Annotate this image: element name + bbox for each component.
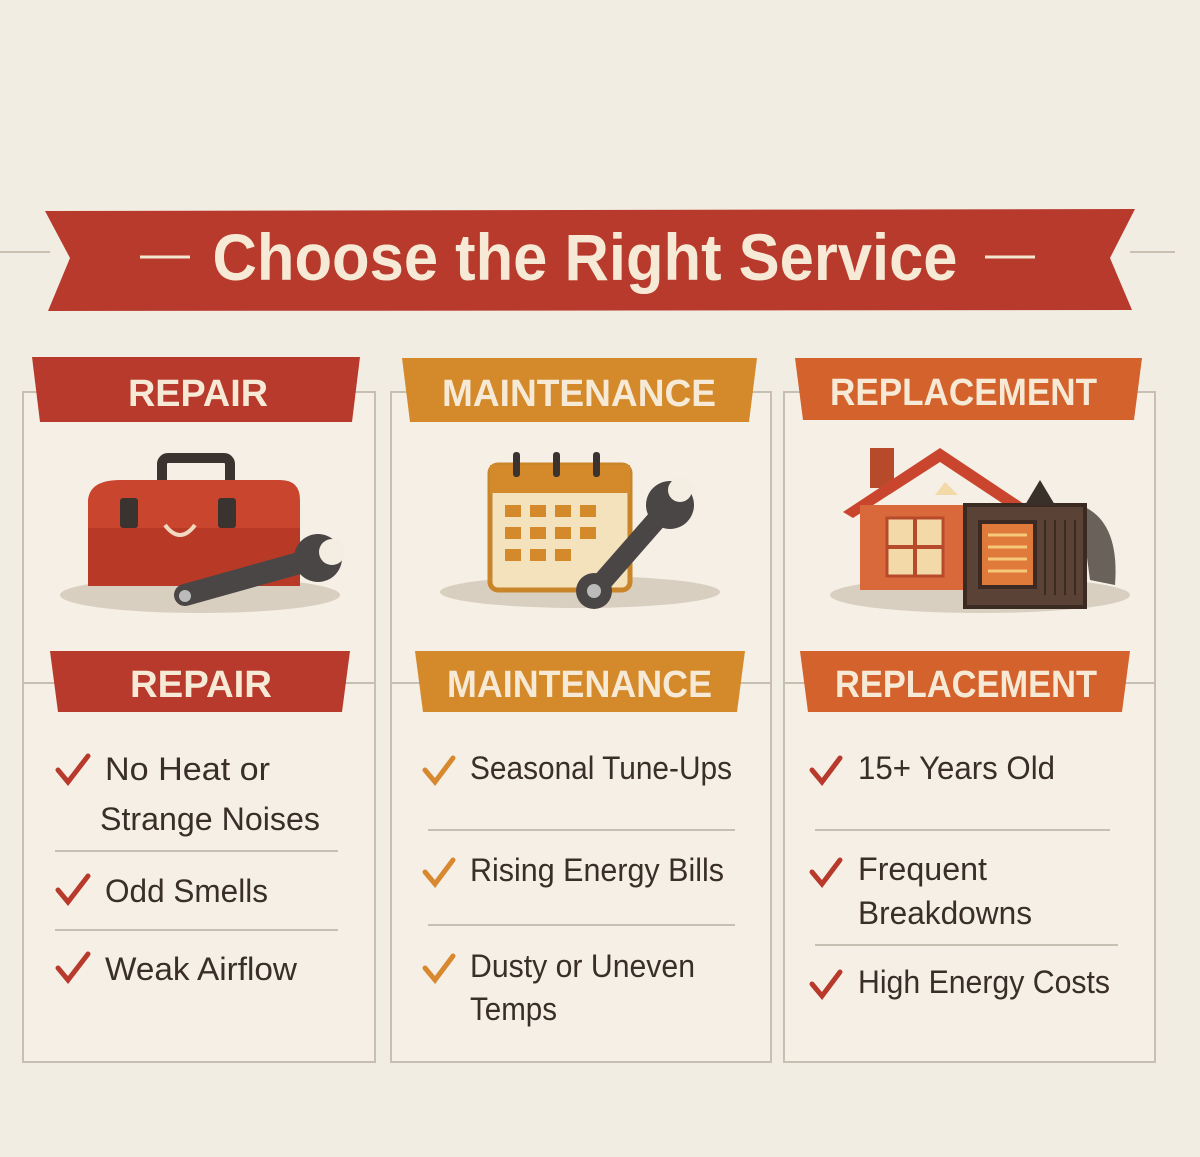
icon: toolbox with wrench — [60, 458, 345, 613]
list: repair: Strange Noises — [100, 801, 320, 837]
tab: maintenance bottom — [415, 651, 745, 712]
title banner — [45, 209, 1135, 311]
list: replacement: 15+ Years Old — [858, 750, 1055, 786]
list: repair: Odd Smells — [105, 873, 268, 909]
icon: house and furnace — [830, 448, 1130, 613]
list: maintenance: Rising Energy Bills — [470, 852, 724, 888]
tab: maintenance top — [402, 358, 757, 422]
list: replacement: Frequent — [858, 851, 987, 887]
tab: maintenance bottom: MAINTENANCE — [447, 664, 712, 706]
tab: repair top — [32, 357, 360, 422]
list: repair: No Heat or — [105, 751, 270, 787]
panel: replacement — [784, 358, 1155, 1062]
tab: replacement top — [795, 358, 1142, 420]
list: replacement — [812, 750, 1118, 1000]
tab: replacement bottom — [800, 651, 1130, 712]
tab: maintenance top: MAINTENANCE — [442, 373, 716, 415]
panel: maintenance — [391, 358, 771, 1062]
list: repair — [55, 751, 338, 987]
icon: calendar with wrench — [440, 452, 720, 609]
list: maintenance — [425, 750, 735, 1027]
list: replacement: High Energy Costs — [858, 964, 1110, 1000]
tab: replacement top: REPLACEMENT — [830, 372, 1097, 414]
list: maintenance: Temps — [470, 991, 557, 1027]
title: Choose the Right Service — [212, 220, 958, 294]
list: replacement: Breakdowns — [858, 895, 1032, 931]
tab: replacement bottom: REPLACEMENT — [835, 664, 1097, 706]
tab: repair bottom — [50, 651, 350, 712]
tab: repair top: REPAIR — [128, 373, 268, 415]
list: maintenance: Seasonal Tune-Ups — [470, 750, 732, 786]
tab: repair bottom: REPAIR — [130, 664, 272, 706]
list: maintenance: Dusty or Uneven — [470, 948, 695, 984]
panel: repair — [23, 357, 375, 1062]
list: repair: Weak Airflow — [105, 951, 298, 987]
